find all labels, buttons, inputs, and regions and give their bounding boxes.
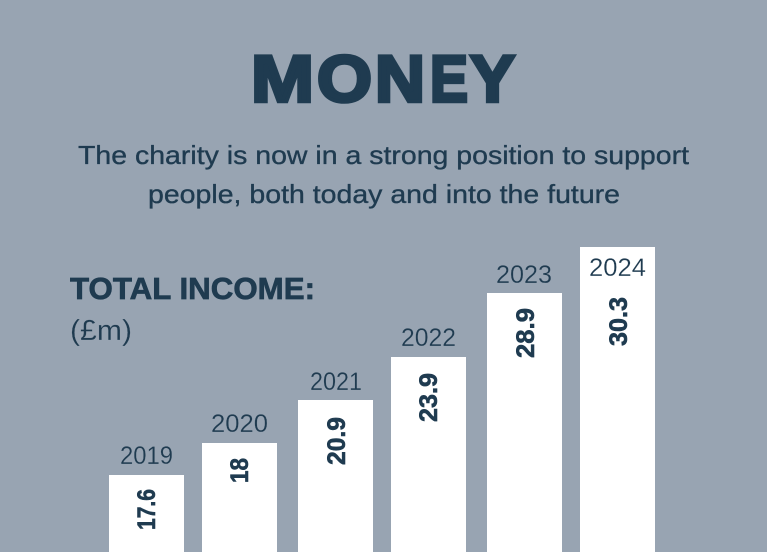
- subtitle: people, both today and into the future: [148, 179, 620, 209]
- title: Y: [470, 42, 515, 116]
- title: M: [251, 42, 314, 116]
- bar: 2019: [109, 442, 184, 552]
- bar: 2019: 2019: [120, 442, 173, 470]
- bar: 2020: [202, 410, 277, 552]
- bar: 2020: 18: [226, 458, 254, 483]
- bar: 2024: 2024: [589, 254, 646, 282]
- bar: 2020: 2020: [211, 410, 268, 438]
- bar: 2022: 2022: [401, 324, 456, 352]
- bar: 2021: 20.9: [323, 417, 351, 465]
- bar: 2019: 17.6: [133, 489, 161, 530]
- bar chart: [109, 247, 655, 552]
- title: N: [375, 42, 425, 116]
- bar: 2024: 30.3: [605, 297, 633, 346]
- bar: 2022: 23.9: [415, 373, 443, 422]
- chart heading: [70, 271, 315, 347]
- chart heading: TOTAL INCOME:: [70, 271, 315, 306]
- bar: 2023: 2023: [496, 261, 552, 289]
- subtitle: [78, 140, 690, 209]
- bar: 2023: 28.9: [512, 308, 540, 358]
- bar: 2023: [487, 261, 562, 552]
- bar: 2022: [391, 324, 466, 552]
- chart heading: (£m): [70, 315, 132, 347]
- bar: 2021: [298, 368, 373, 552]
- bar: 2024: [580, 247, 655, 552]
- title: O: [317, 42, 372, 116]
- title: E: [430, 42, 468, 116]
- subtitle: The charity is now in a strong position to support: [78, 140, 690, 170]
- bar: 2021: 2021: [310, 368, 362, 396]
